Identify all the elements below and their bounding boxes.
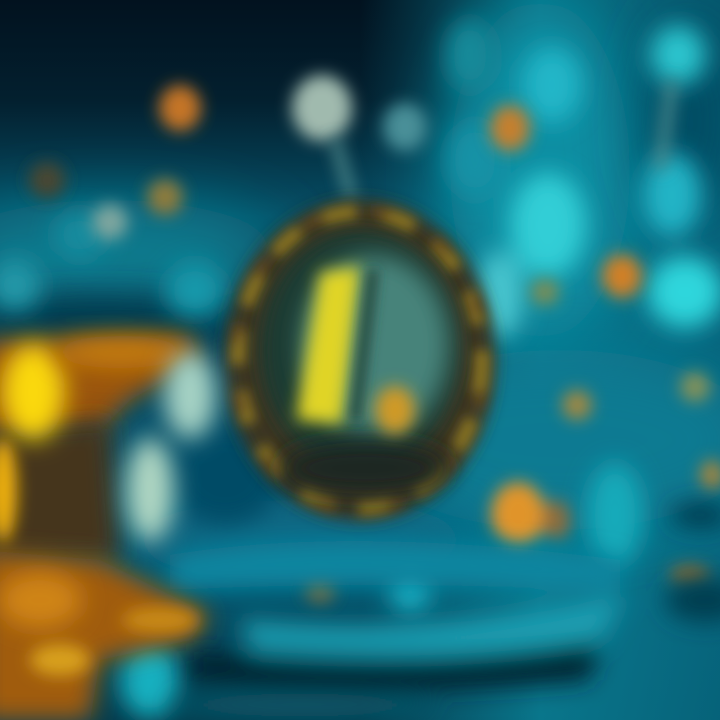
coin: dark lower band [280,442,450,494]
stem lines above coin [335,80,672,200]
coin: green face [301,255,449,435]
coin: gold rim segments [235,210,485,510]
coin: dark inner ring [260,230,460,470]
coin: outer ring [225,200,495,520]
coin: dark divider [350,270,378,420]
bokeh: pale and orange lights [29,75,720,603]
coin [225,200,495,520]
foreground: golden shape on left [0,335,216,720]
water surface ripples [170,425,720,717]
coin: yellow bar [296,266,360,424]
coin: orange dot [375,386,415,434]
